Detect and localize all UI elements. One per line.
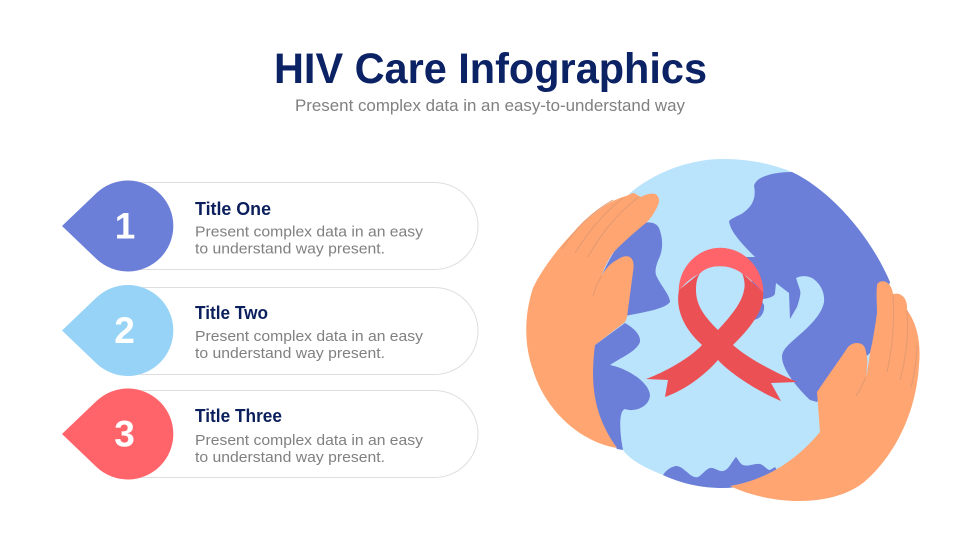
pill outline one (100, 182, 478, 270)
ribbon: lower band (646, 273, 797, 401)
number two: 2 (114, 310, 135, 351)
left hand finger lines (562, 197, 639, 296)
continent: upper left (600, 222, 670, 316)
teardrop badge three (62, 388, 173, 480)
title: HIV Care Infographics (274, 45, 707, 93)
body one: to understand way present. (195, 240, 385, 258)
heading three: Title Three (195, 406, 282, 426)
right hand (730, 281, 920, 501)
panel: item three (62, 388, 478, 480)
pill outline three (100, 390, 478, 478)
heading one: Title One (195, 199, 271, 219)
body two: Present complex data in an easy (195, 328, 424, 345)
number one: 1 (115, 206, 135, 246)
body two: to understand way present. (195, 345, 385, 362)
ribbon: upper loop (679, 248, 763, 292)
right hand finger lines (856, 295, 917, 396)
teardrop badge two (62, 285, 173, 376)
continent: bottom (663, 457, 778, 488)
illustration: hands holding globe with ribbon (526, 159, 920, 501)
continent: small island (752, 298, 764, 320)
panel: item one (62, 181, 478, 272)
pill outline two (100, 288, 478, 374)
globe ocean (592, 159, 892, 488)
number three: 3 (114, 414, 135, 454)
heading two: Title Two (195, 303, 268, 323)
body one: Present complex data in an easy (195, 224, 424, 240)
left hand (526, 193, 659, 448)
body three: Present complex data in an easy (195, 432, 424, 449)
continent: upper right (729, 172, 890, 402)
continent: lower left (590, 323, 650, 450)
subtitle: Present complex data in an easy-to-understand way (295, 97, 686, 115)
teardrop badge one (62, 181, 173, 272)
panel: item two (62, 285, 478, 376)
body three: to understand way present. (195, 449, 385, 466)
